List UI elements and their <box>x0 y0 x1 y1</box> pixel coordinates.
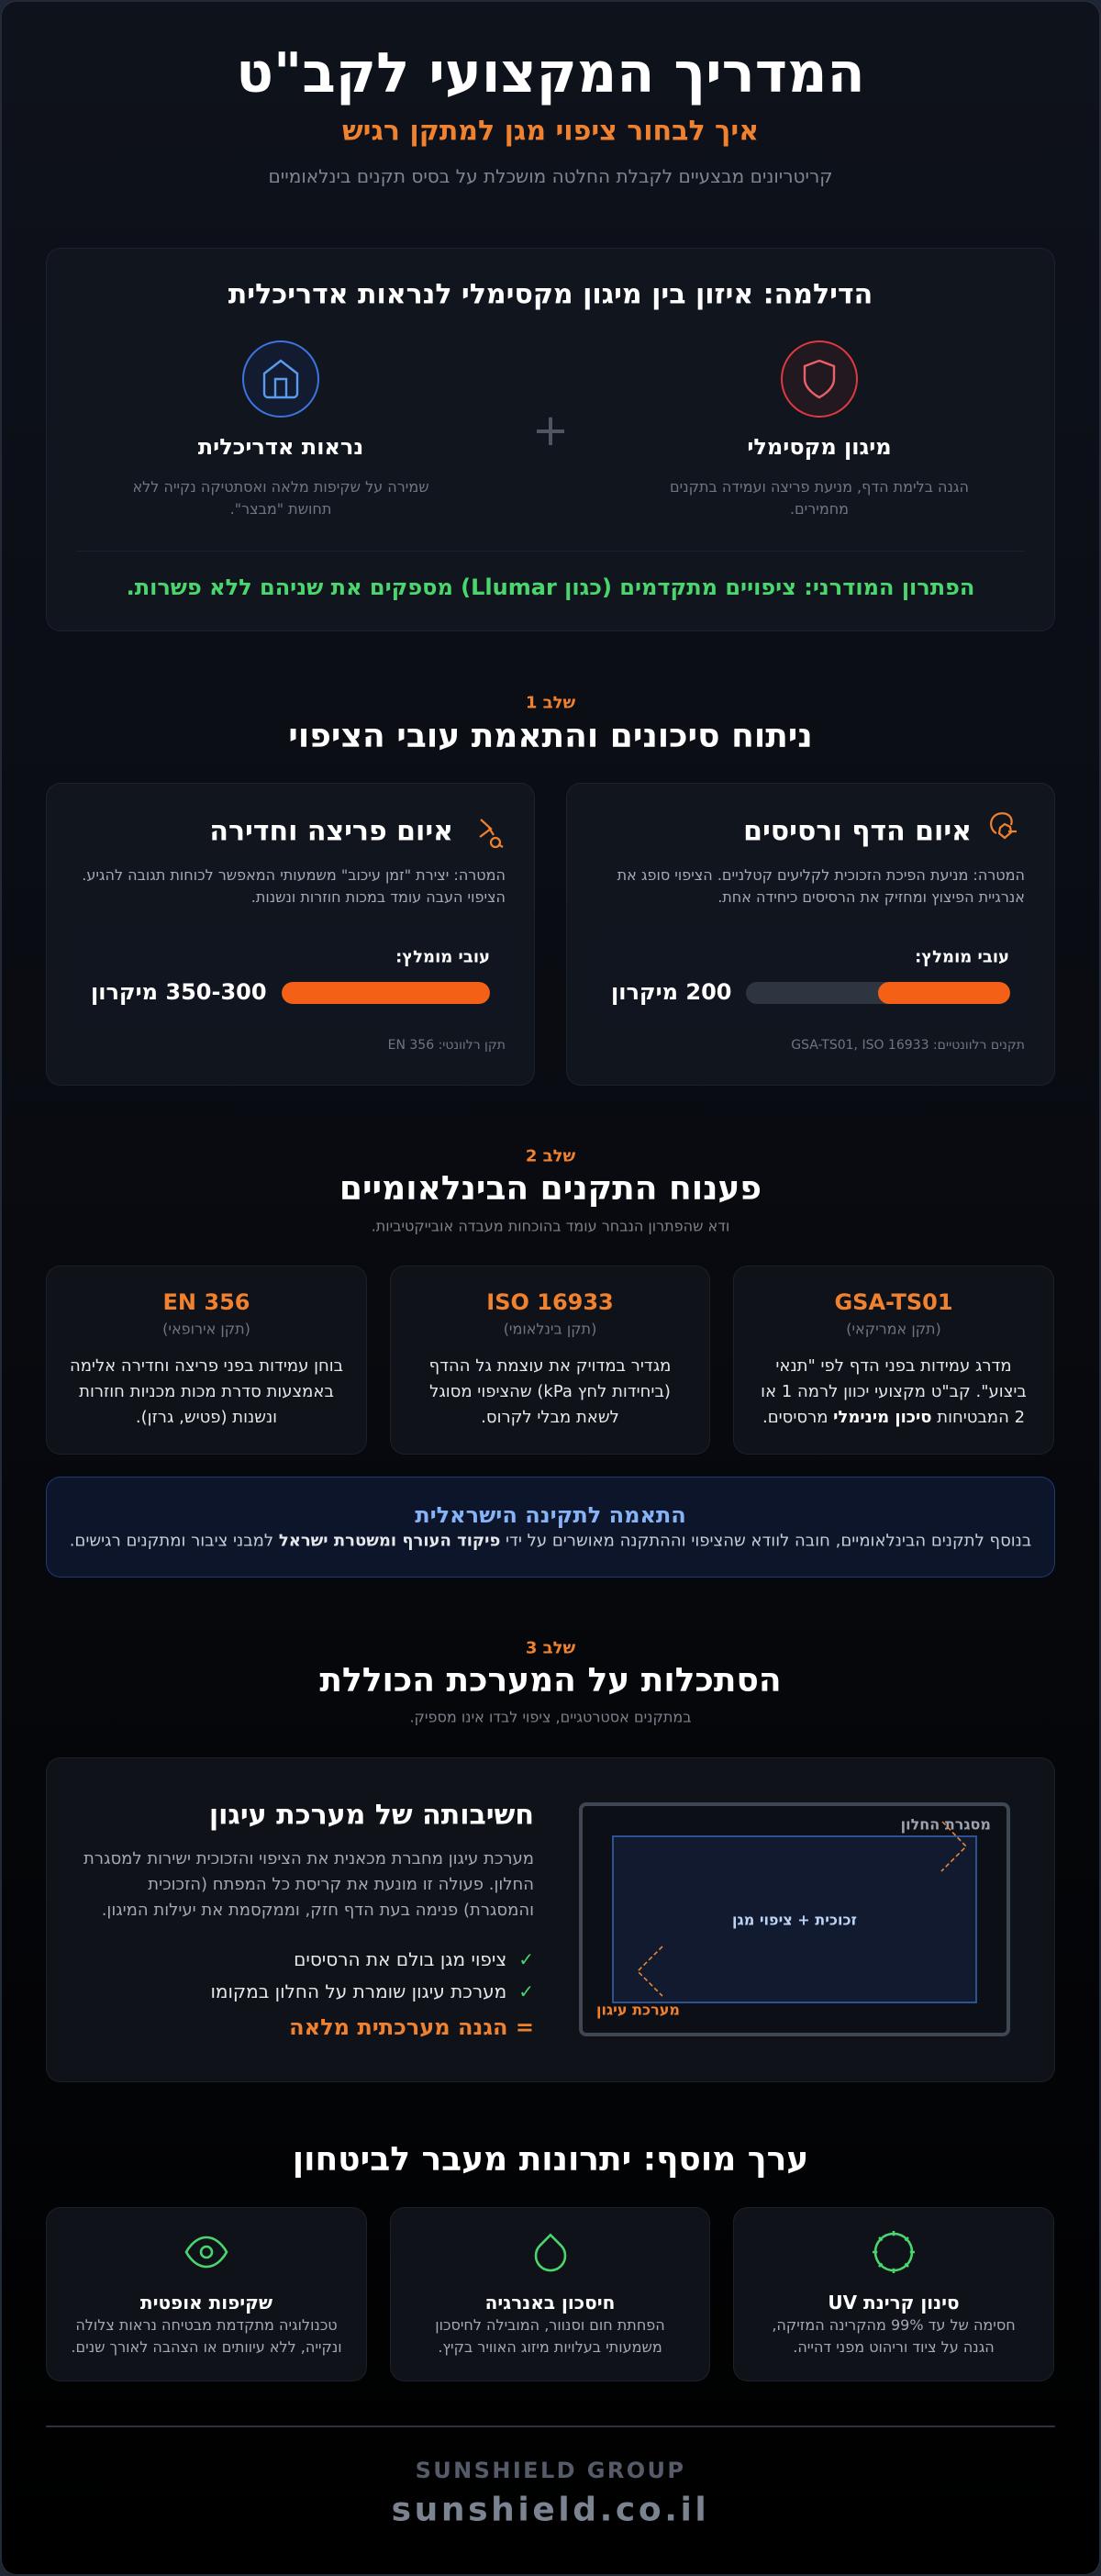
panel: blast threat <box>566 783 1055 1086</box>
list item 2: ✓מערכת עיגון שומרת על החלון במקומו <box>210 1980 534 2002</box>
thickness value: 200 מיקרון <box>611 979 732 1005</box>
standard description: באמצעות סדרת מכות מכניות חוזרות <box>79 1382 334 1401</box>
icon: hammer <box>479 819 503 848</box>
anchoring paragraph: מערכת עיגון מחברת מכאנית את הציפוי והזכוכית ישירות למסגרת <box>83 1849 534 1868</box>
panel: GSA-TS01 <box>733 1266 1054 1455</box>
step 3 label: שלב 3 <box>526 1639 575 1657</box>
standard description: ונשנות (פטיש, גרזן). <box>136 1408 277 1427</box>
panel: ISO 16933 <box>390 1266 710 1455</box>
protection description: הגנה בלימת הדף, מניעת פריצה ועמידה בתקנים <box>670 478 969 496</box>
anchoring heading: חשיבותה של מערכת עיגון <box>209 1799 534 1832</box>
relevant standard: תקן רלוונטי: EN 356 <box>388 1038 506 1053</box>
website: sunshield.co.il <box>392 2491 709 2529</box>
icon: shield <box>781 340 858 418</box>
column: maximum protection <box>670 340 969 518</box>
callout text: בנוסף לתקנים הבינלאומיים, חובה לוודא שהציפוי וההתקנה מאושרים על ידי פיקוד העורף ומשטרת ישראל למבני ציבור ומתקנים רגישים. <box>70 1531 1031 1551</box>
standard description <box>70 1356 343 1427</box>
icon: house <box>242 340 319 418</box>
benefit description: חסימה של עד 99% מהקרינה המזיקה, <box>772 2316 1016 2334</box>
thickness bar <box>746 982 1010 1004</box>
step 2 heading: פענוח התקנים הבינלאומיים <box>339 1169 762 1208</box>
benefit description: ונקייה, ללא עיוותים או הצהבה לאורך שנים. <box>71 2338 342 2356</box>
recommended thickness box <box>599 930 1025 1023</box>
icon: eye <box>185 2236 228 2269</box>
thickness label: עובי מומלץ: <box>395 947 490 967</box>
frame label: מסגרת החלון <box>901 1815 991 1834</box>
panel: dilemma <box>46 248 1055 631</box>
break-in description: המטרה: יצירת "זמן עיכוב" משמעותי המאפשר לכוחות תגובה להגיע. <box>82 866 506 884</box>
benefit description: טכנולוגיה מתקדמת מבטיחה נראות צלולה <box>75 2316 338 2334</box>
panel: energy savings <box>390 2207 710 2381</box>
recommended thickness box <box>78 930 505 1023</box>
thickness label: עובי מומלץ: <box>915 947 1009 967</box>
standard description: (ביחידות לחץ kPa) שהציפוי מסוגל <box>429 1382 671 1401</box>
blast description: המטרה: מניעת הפיכת הזכוכית לקליעים קטלניים. הציפוי סופג את <box>617 866 1025 884</box>
result line: = הגנה מערכתית מלאה <box>289 2014 534 2040</box>
protection description: מחמירים. <box>790 500 849 518</box>
appearance description: שמירה על שקיפות מלאה ואסתטיקה נקייה ללא <box>132 478 429 496</box>
benefits heading: ערך מוסף: יתרונות מעבר לביטחון <box>293 2140 808 2179</box>
benefit description: הפחתת חום וסנוור, המובילה לחיסכון <box>435 2316 665 2334</box>
benefit description: הגנה על ציוד וריהוט מפני דהייה. <box>793 2338 995 2356</box>
standard origin: (תקן אמריקאי) <box>846 1320 941 1338</box>
panel: Israeli compliance callout <box>46 1477 1055 1578</box>
benefit description <box>772 2316 1016 2356</box>
break-in heading: איום פריצה וחדירה <box>209 815 453 848</box>
benefit title: סינון קרינת UV <box>828 2292 960 2314</box>
benefit title: שקיפות אופטית <box>140 2292 272 2314</box>
company name: SUNSHIELD GROUP <box>416 2458 685 2483</box>
pane label: זכוכית + ציפוי מגן <box>732 1911 857 1929</box>
protection description <box>670 478 969 518</box>
standard origin: (תקן אירופאי) <box>162 1320 250 1338</box>
benefit description <box>435 2316 665 2356</box>
step 2 subtitle: ודא שהפתרון הנבחר עומד בהוכחות מעבדה אובייקטיביות. <box>372 1217 729 1235</box>
title: המדריך המקצועי לקב"ט <box>236 41 865 106</box>
standard description <box>761 1356 1027 1427</box>
panel: optical clarity <box>46 2207 367 2381</box>
standard description: מגדיר במדויק את עוצמת גל ההדף <box>429 1356 671 1376</box>
standard description: בוחן עמידות בפני פריצה וחדירה אלימה <box>70 1356 343 1376</box>
appearance label: נראות אדריכלית <box>198 434 363 460</box>
step 1 label: שלב 1 <box>526 694 575 712</box>
panel: EN 356 <box>46 1266 367 1455</box>
icon: drop <box>534 2234 567 2272</box>
standard name: GSA-TS01 <box>834 1289 953 1315</box>
glass and film pane <box>612 1835 977 2003</box>
benefit description: משמעותי בעלויות מיזוג האוויר בקיץ. <box>438 2338 662 2356</box>
list item 1: ✓ציפוי מגן בולם את הרסיסים <box>294 1948 534 1970</box>
callout heading: התאמה לתקינה הישראלית <box>415 1502 686 1528</box>
blast heading: איום הדף ורסיסים <box>743 815 972 848</box>
plus sign: + <box>532 405 569 456</box>
blast description <box>617 866 1025 906</box>
appearance description: תחושת "מבצר". <box>230 500 331 518</box>
blast description: אנרגיית הפיצוץ ומחזיק את הרסיסים כיחידה אחת. <box>717 888 1025 906</box>
protection label: מיגון מקסימלי <box>747 434 892 460</box>
panel: UV filtering <box>733 2207 1054 2381</box>
footer <box>392 2458 709 2529</box>
thickness bar <box>282 982 490 1004</box>
standard description <box>429 1356 671 1427</box>
break-in description: הציפוי העבה עומד במכות חוזרות ונשנות. <box>251 888 506 906</box>
standard name: EN 356 <box>163 1289 250 1315</box>
diagram: window anchoring <box>579 1802 1010 2036</box>
anchoring paragraph: החלון. פעולה זו מונעת את קריסת כל המפתח (הזכוכית <box>148 1875 534 1894</box>
dashed anchor lines <box>638 1821 967 1997</box>
intro text: קריטריונים מבצעיים לקבלת החלטה מושכלת על בסיס תקנים בינלאומיים <box>269 165 832 187</box>
appearance description <box>132 478 429 518</box>
step 3 subtitle: במתקנים אסטרטגיים, ציפוי לבדו אינו מספיק. <box>409 1709 692 1725</box>
standard description: מדרג עמידות בפני הדף לפי "תנאי <box>775 1356 1012 1376</box>
benefit title: חיסכון באנרגיה <box>485 2292 615 2314</box>
standard name: ISO 16933 <box>486 1289 614 1315</box>
panel: anchoring system <box>46 1757 1055 2082</box>
anchor label: מערכת עיגון <box>596 2001 680 2019</box>
subtitle: איך לבחור ציפוי מגן למתקן רגיש <box>342 116 759 147</box>
icon: sun <box>873 2231 915 2273</box>
break-in description <box>82 866 506 906</box>
icon: blast <box>990 812 1017 839</box>
standard description: לשאת מבלי לקרוס. <box>481 1408 619 1427</box>
panel: break-in threat <box>46 783 535 1086</box>
benefit description <box>71 2316 342 2356</box>
thickness value: 350-300 מיקרון <box>91 979 267 1005</box>
step 2 label: שלב 2 <box>526 1147 575 1165</box>
anchoring paragraph: והמסגרת) פנימה בעת הדף חזק, וממקסמת את יעילות המיגון. <box>102 1901 534 1920</box>
standard origin: (תקן בינלאומי) <box>504 1320 596 1338</box>
standard description: ביצוע". קב"ט מקצועי יכוון לרמה 1 או <box>761 1382 1027 1401</box>
standard description: 2 המבטיחות סיכון מינימלי מרסיסים. <box>762 1408 1025 1427</box>
step 1 heading: ניתוח סיכונים והתאמת עובי הציפוי <box>288 718 813 754</box>
step 3 heading: הסתכלות על המערכת הכוללת <box>319 1661 782 1700</box>
dilemma heading: הדילמה: איזון בין מיגון מקסימלי לנראות אדריכלית <box>228 279 873 310</box>
column: architectural appearance <box>132 340 429 518</box>
anchoring paragraph <box>83 1849 534 1920</box>
relevant standards: תקנים רלוונטיים: GSA-TS01, ISO 16933 <box>791 1038 1025 1053</box>
solution statement: הפתרון המודרני: ציפויים מתקדמים (כגון Llumar) מספקים את שניהם ללא פשרות. <box>127 574 974 600</box>
